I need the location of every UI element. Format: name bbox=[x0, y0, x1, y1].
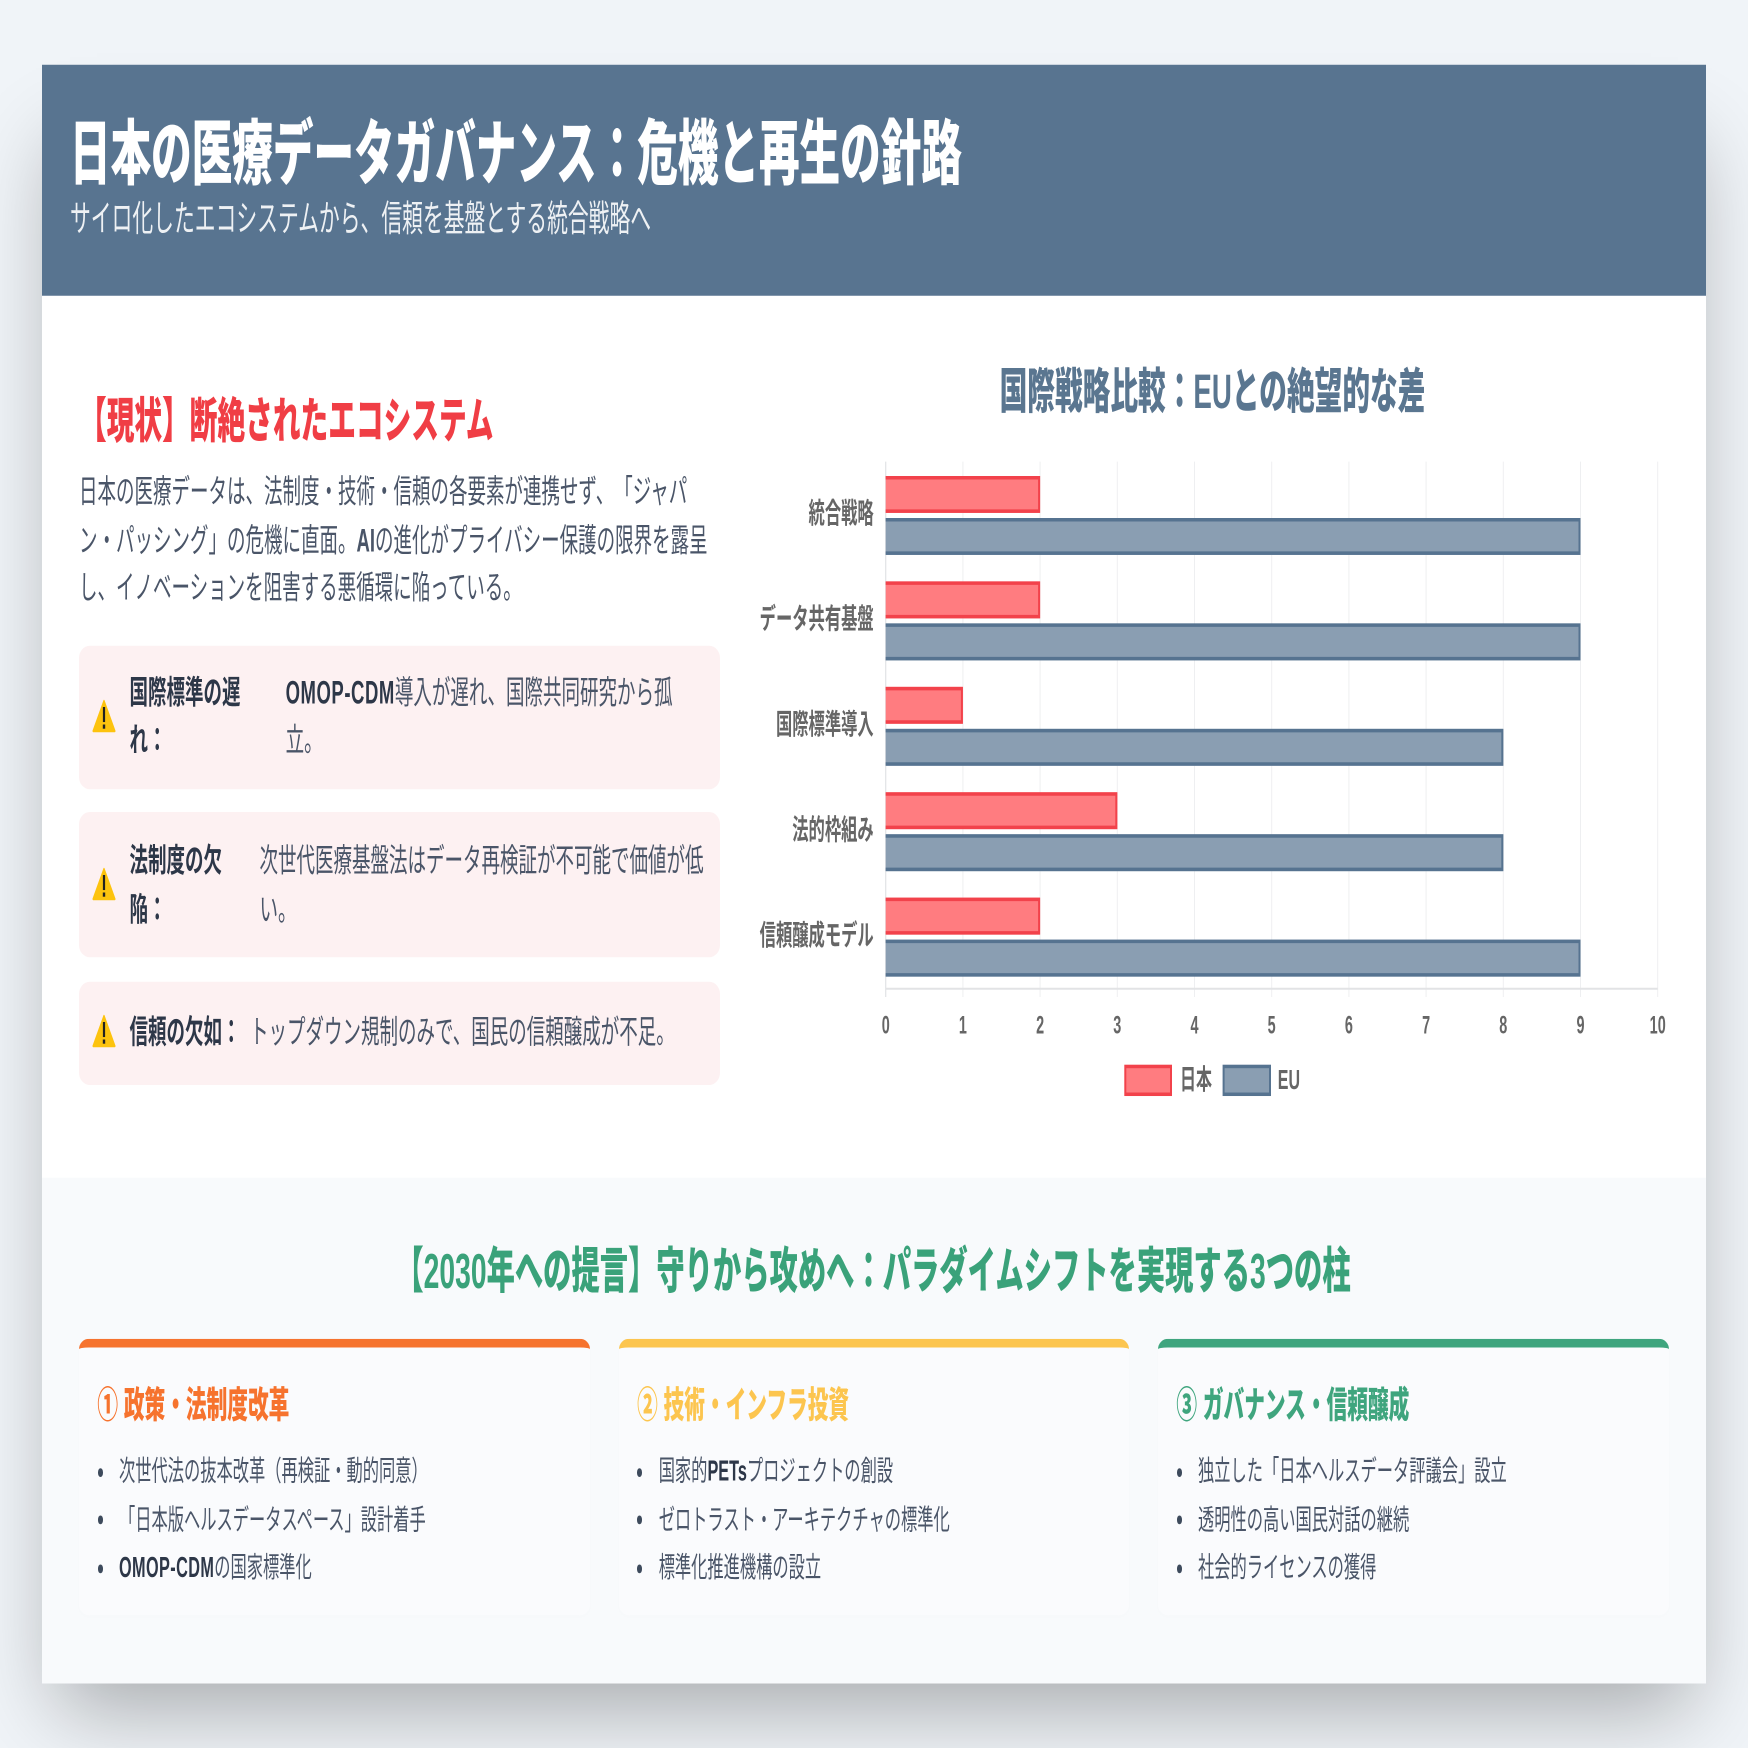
x axis tick labels: 3 bbox=[1113, 1011, 1121, 1040]
pillar list: 独立した「日本ヘルスデータ評議会」設立 bbox=[1198, 1456, 1507, 1488]
label: れ： bbox=[130, 721, 167, 757]
x axis tick labels: 5 bbox=[1268, 1011, 1276, 1040]
x axis tick labels: 6 bbox=[1345, 1011, 1353, 1040]
pillar list: 標準化推進機構の設立 bbox=[659, 1553, 821, 1584]
pillar list: 「日本版ヘルスデータスペース」設計着手 bbox=[119, 1504, 426, 1536]
label bbox=[130, 841, 222, 927]
callout: lack of trust bbox=[79, 981, 720, 1085]
panel: current situation bbox=[79, 394, 720, 1085]
pillar list bbox=[98, 1456, 428, 1584]
heading: proposals: 【2030年への提言】守りから攻めへ：パラダイムシフトを実現する3つの柱 bbox=[395, 1243, 1351, 1299]
heading: current situation: 【現状】断絶されたエコシステム bbox=[79, 394, 493, 448]
bar chart bbox=[760, 462, 1666, 1096]
x axis tick labels: 7 bbox=[1422, 1011, 1430, 1040]
pillar list: 透明性の高い国民対話の継続 bbox=[1198, 1504, 1409, 1536]
description bbox=[286, 673, 673, 757]
callout: international standards bbox=[79, 645, 720, 789]
x axis tick labels: 8 bbox=[1499, 1011, 1507, 1040]
pillar list: 国家的PETsプロジェクトの創設 bbox=[659, 1456, 893, 1488]
text block: situation description: し、イノベーションを阻害する悪循環に陥っている。 bbox=[79, 570, 522, 606]
x axis tick labels: 4 bbox=[1190, 1011, 1199, 1040]
pillar list: 次世代法の抜本改革（再検証・動的同意） bbox=[119, 1456, 428, 1488]
legend bbox=[1125, 1063, 1300, 1095]
category labels: 国際標準導入 bbox=[776, 708, 874, 740]
label: 法制度の欠 bbox=[130, 841, 222, 878]
pillar list: OMOP-CDMの国家標準化 bbox=[119, 1553, 312, 1584]
text block: situation description: 日本の医療データは、法制度・技術・信頼の各要素が連携せず、「ジャパ bbox=[79, 473, 687, 510]
description: OMOP-CDM導入が遅れ、国際共同研究から孤 bbox=[286, 673, 673, 710]
bars: EU bbox=[886, 518, 1580, 977]
x axis tick labels: 0 bbox=[882, 1011, 890, 1040]
pillar heading: ③ ガバナンス・信頼醸成 bbox=[1176, 1387, 1409, 1427]
panel: 2030 proposals bbox=[42, 1178, 1706, 1684]
legend: 日本 bbox=[1180, 1063, 1212, 1095]
description: い。 bbox=[260, 890, 297, 927]
category labels bbox=[760, 497, 874, 951]
subtitle: サイロ化したエコシステムから、信頼を基盤とする統合戦略へ bbox=[70, 200, 651, 241]
label bbox=[130, 673, 241, 757]
icon: warning bbox=[92, 700, 116, 732]
title: 日本の医療データガバナンス：危機と再生の針路 bbox=[70, 114, 962, 194]
pillar card: policy bbox=[79, 1338, 590, 1616]
pillar list bbox=[1177, 1456, 1507, 1584]
label: 国際標準の遅 bbox=[130, 673, 241, 710]
heading: chart title: 国際戦略比較：EUとの絶望的な差 bbox=[1000, 364, 1425, 418]
header banner bbox=[42, 64, 1706, 296]
description: 次世代医療基盤法はデータ再検証が不可能で価値が低 bbox=[260, 841, 704, 878]
category labels: 信頼醸成モデル bbox=[760, 919, 874, 951]
callout: legal flaws bbox=[79, 813, 720, 957]
icon: warning bbox=[92, 1014, 116, 1048]
category labels: 法的枠組み bbox=[792, 814, 874, 846]
pillar card: governance bbox=[1158, 1338, 1669, 1616]
description: 立。 bbox=[286, 721, 323, 757]
legend: EU bbox=[1278, 1063, 1300, 1095]
icon: warning bbox=[92, 868, 116, 900]
x axis tick labels: 9 bbox=[1576, 1011, 1585, 1040]
pillar list: 社会的ライセンスの獲得 bbox=[1198, 1553, 1376, 1584]
pillar heading: ① 政策・法制度改革 bbox=[97, 1387, 289, 1427]
x axis tick labels: 10 bbox=[1650, 1011, 1666, 1040]
description: トップダウン規制のみで、国民の信頼醸成が不足。 bbox=[250, 1013, 675, 1050]
category labels: 統合戦略 bbox=[809, 497, 874, 529]
description bbox=[260, 841, 704, 927]
panel: international comparison bbox=[760, 364, 1666, 1096]
label: 信頼の欠如： bbox=[130, 1013, 241, 1050]
pillar list: ゼロトラスト・アーキテクチャの標準化 bbox=[659, 1504, 950, 1536]
text block: situation description: ン・パッシング」の危機に直面。AIの進化がプライバシー保護の限界を露呈 bbox=[79, 522, 708, 559]
pillar heading: ② 技術・インフラ投資 bbox=[637, 1387, 849, 1427]
text block: situation description bbox=[79, 473, 708, 606]
pillar list bbox=[637, 1456, 950, 1584]
pillar card: technology bbox=[619, 1338, 1129, 1616]
x axis tick labels: 1 bbox=[959, 1011, 967, 1040]
label: 陥： bbox=[130, 890, 167, 927]
bars: Japan bbox=[886, 476, 1117, 935]
x axis tick labels: 2 bbox=[1036, 1011, 1044, 1040]
category labels: データ共有基盤 bbox=[760, 603, 874, 635]
x axis tick labels bbox=[882, 1011, 1666, 1040]
